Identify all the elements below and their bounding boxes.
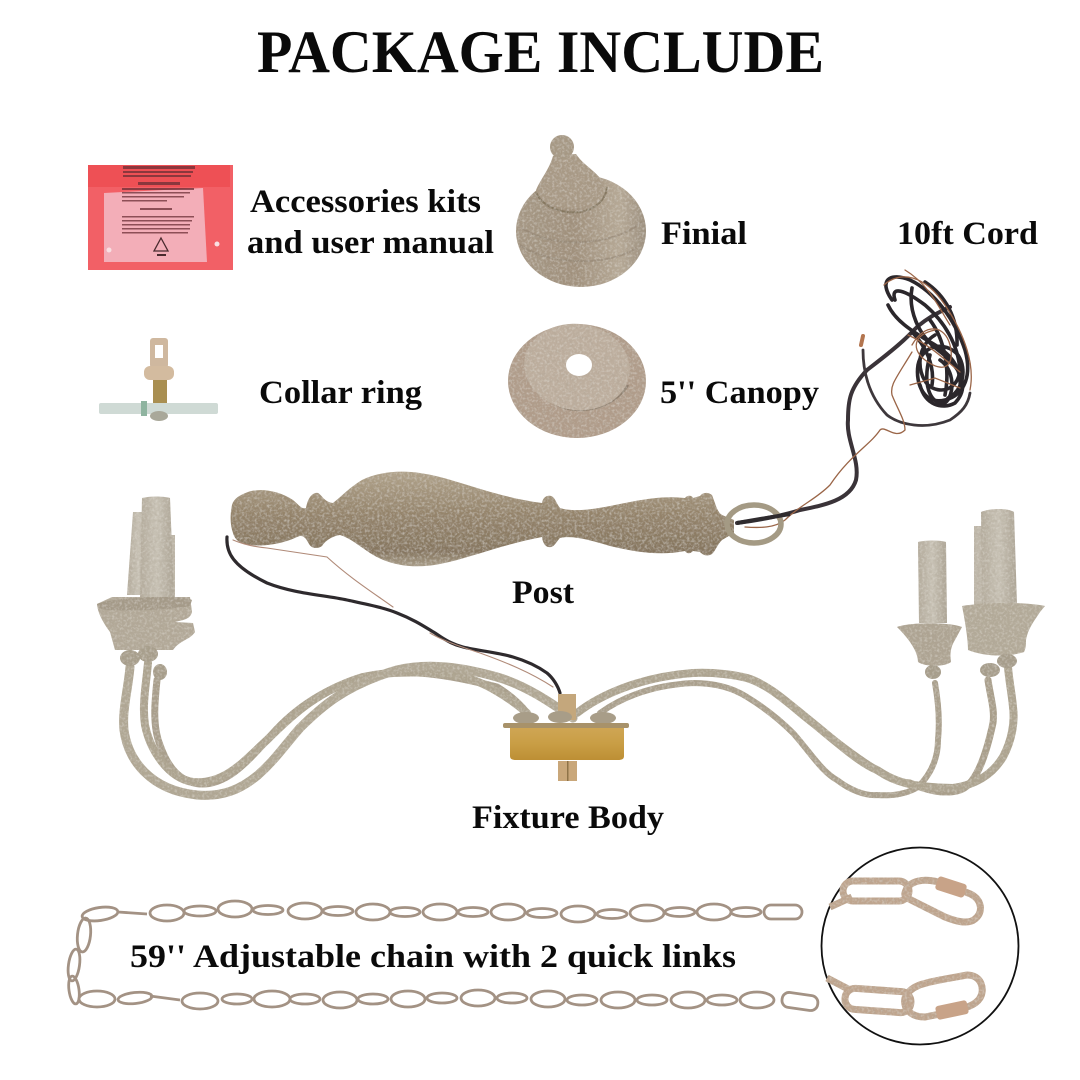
chain left curl <box>66 917 92 1005</box>
icon: fixture wiring <box>227 537 560 693</box>
label: fixture body: Fixture Body <box>472 800 665 836</box>
label: post: Post <box>512 575 574 611</box>
icon: 10ft cord coil <box>737 270 971 527</box>
left knobs <box>120 650 140 666</box>
label: accessories kits and user manual: and user manual <box>247 225 494 261</box>
upper links <box>830 897 852 907</box>
label: accessories kits and user manual <box>247 184 494 261</box>
right knobs <box>925 665 941 679</box>
label: collar ring: Collar ring <box>259 375 423 411</box>
title: PACKAGE INCLUDE <box>257 19 824 85</box>
icon: fixture body <box>503 694 629 781</box>
icon: accessories kit bag <box>88 165 233 270</box>
icon: finial <box>516 135 646 287</box>
icon: right chandelier arms <box>577 509 1045 795</box>
icon: chain <box>66 901 819 1011</box>
chain top row <box>81 901 802 923</box>
label: 10ft cord: 10ft Cord <box>897 216 1038 252</box>
right cups <box>897 623 962 666</box>
hanging ring <box>727 505 781 543</box>
cord through ring <box>737 514 790 523</box>
icon: left chandelier arms <box>97 496 573 795</box>
icon: post with hanging ring <box>231 472 790 566</box>
callout: chain detail circle <box>822 848 1018 1044</box>
icon: collar ring <box>99 338 218 421</box>
post body <box>231 472 734 566</box>
chain bottom row <box>79 990 819 1011</box>
label: accessories kits and user manual: Accessories kits <box>250 184 481 220</box>
lower links <box>827 978 850 990</box>
right candles <box>918 540 947 623</box>
label: 5 inch canopy: 5'' Canopy <box>660 375 820 411</box>
icon: canopy <box>508 317 646 438</box>
label: finial: Finial <box>661 216 747 252</box>
label: adjustable chain: 59'' Adjustable chain with 2 quick links <box>130 939 736 975</box>
left cups <box>97 597 195 650</box>
left candles <box>127 512 150 595</box>
